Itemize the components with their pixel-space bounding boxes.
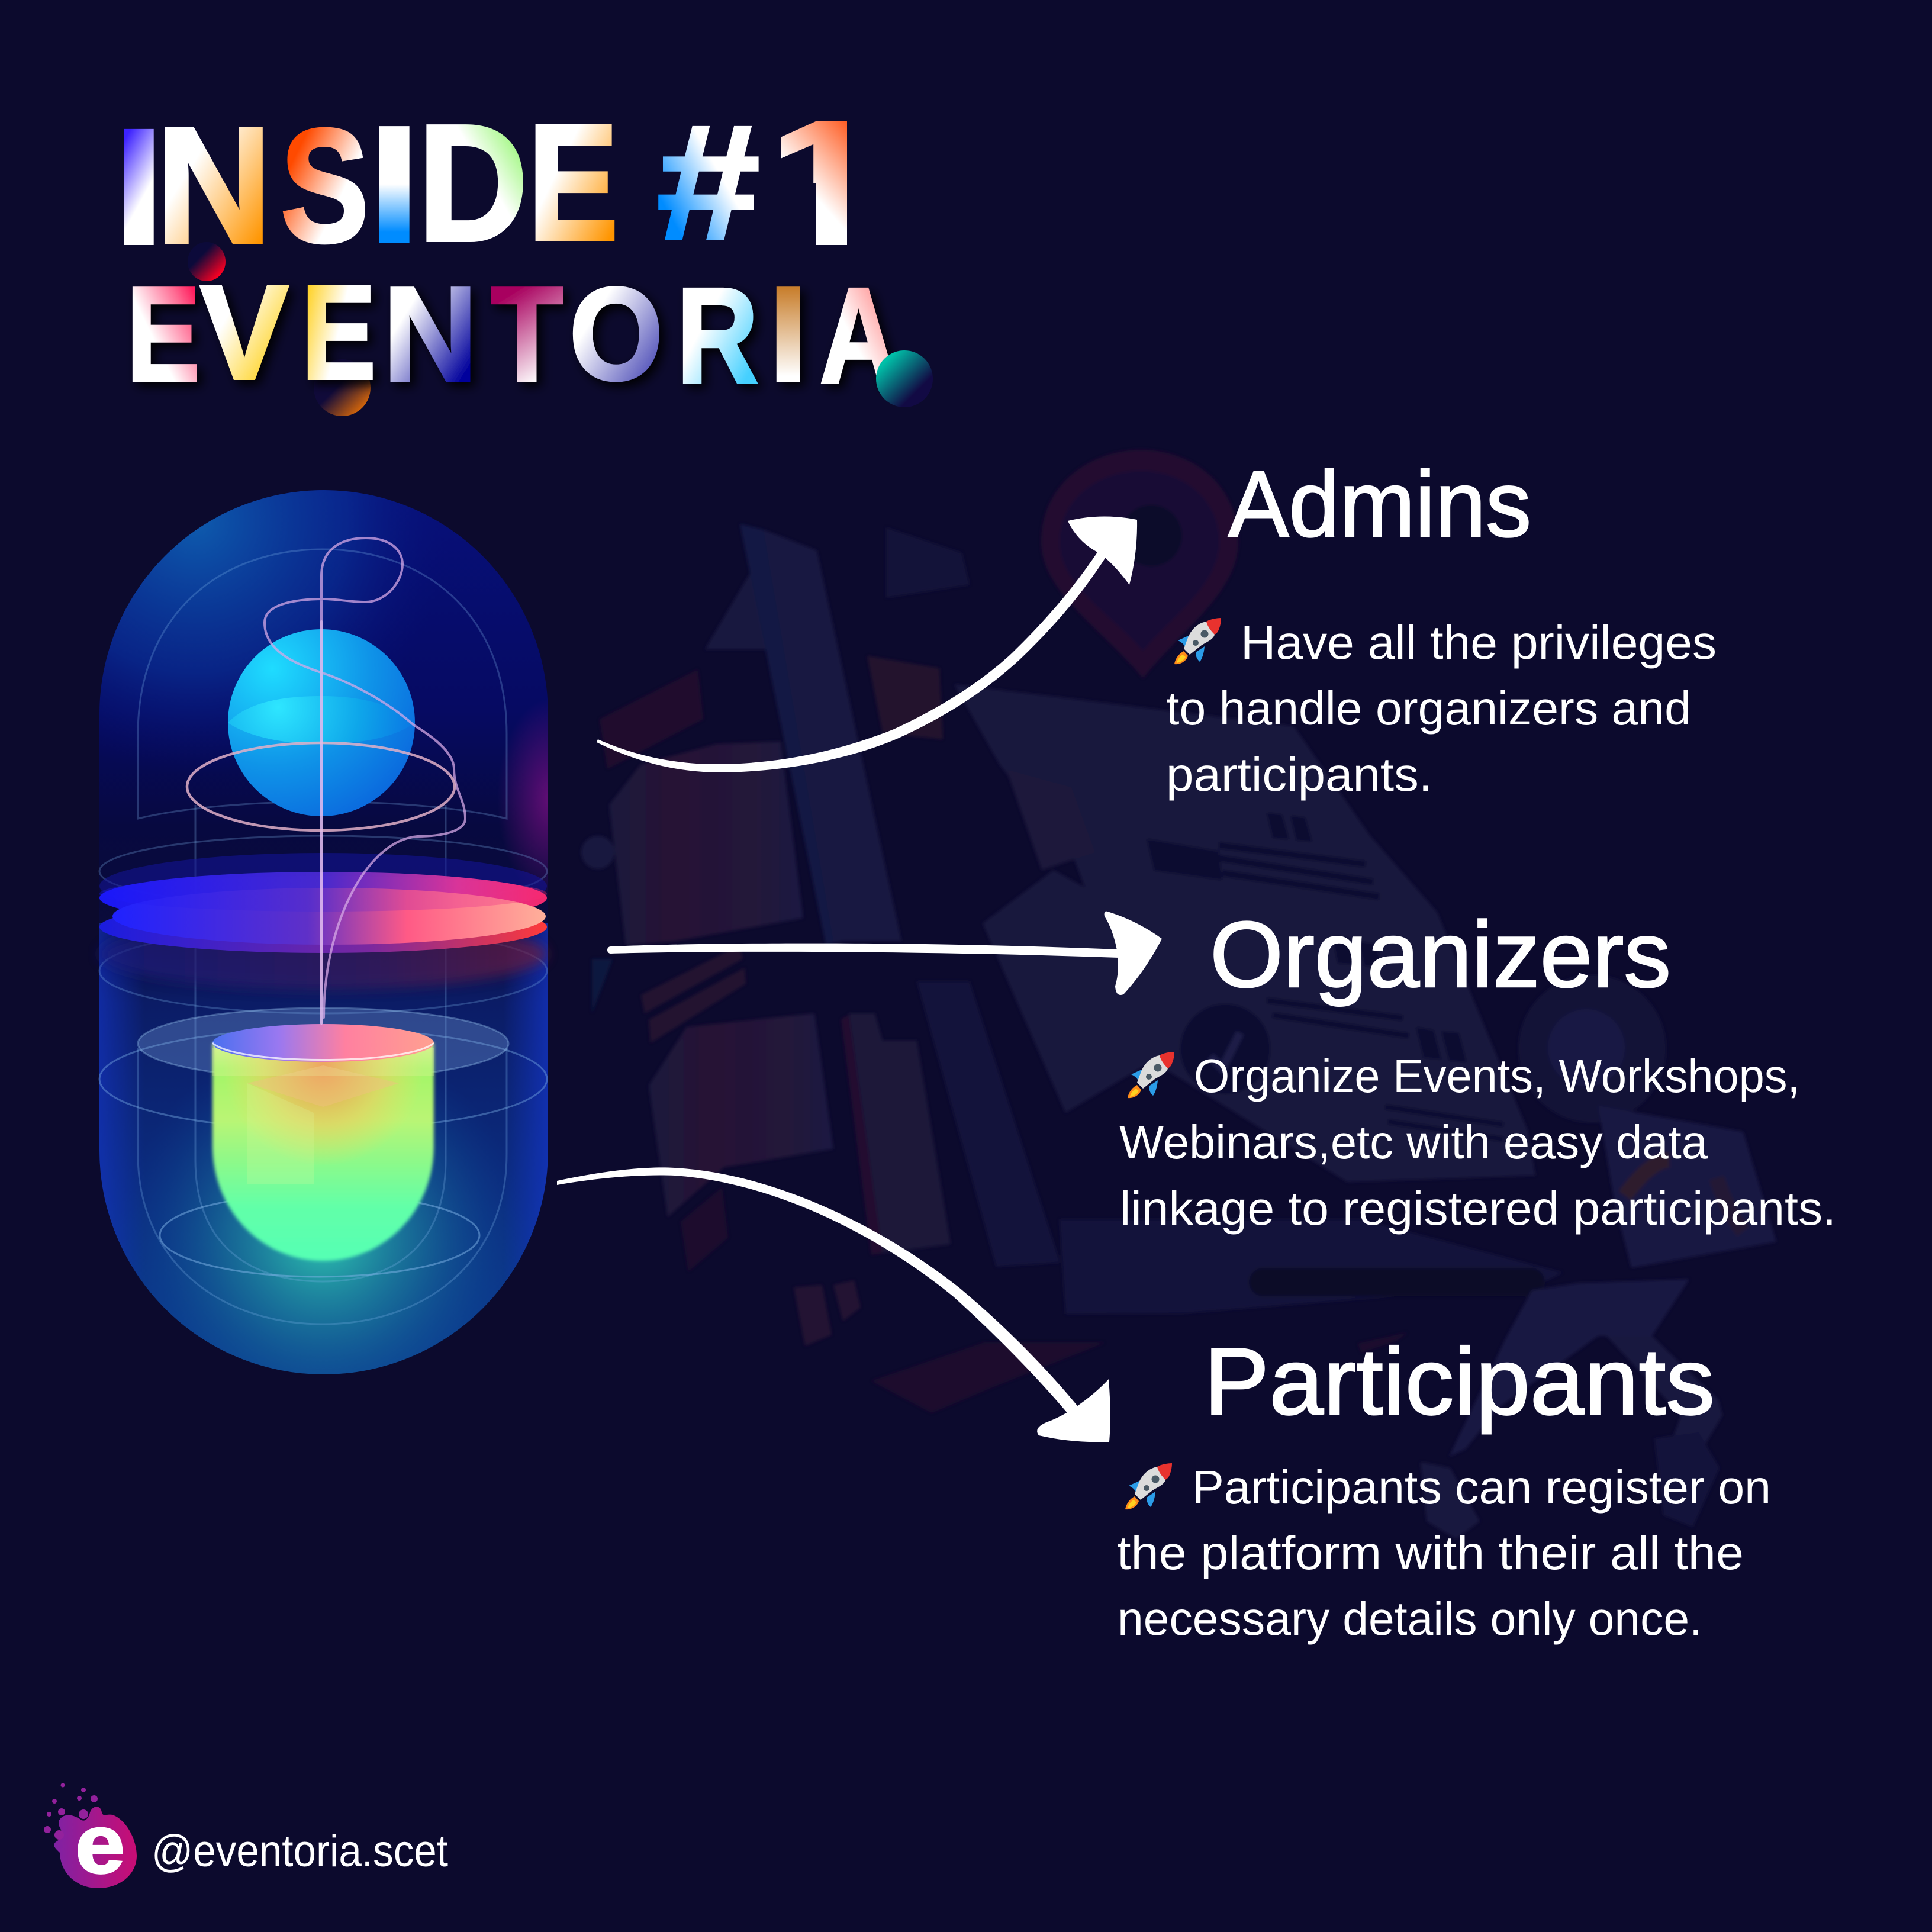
inner capsule outlines bbox=[99, 549, 547, 1324]
heading: Admins: Admins bbox=[1228, 452, 1531, 556]
title: INSIDE #1 bbox=[124, 121, 847, 245]
title: EVENTORIA: A bbox=[820, 260, 897, 411]
title: EVENTORIA: T bbox=[491, 259, 563, 410]
heading: Participants: Participants bbox=[1204, 1328, 1715, 1434]
glowing discs bbox=[99, 853, 547, 990]
title: EVENTORIA: R bbox=[677, 259, 758, 411]
decorative dot: teal bbox=[876, 350, 933, 407]
text: Admins description: to handle organizers and bbox=[1166, 682, 1691, 735]
title: EVENTORIA: I bbox=[768, 259, 808, 409]
bottom slab bbox=[1060, 1219, 1563, 1314]
text: Participants description: necessary details only once. bbox=[1118, 1592, 1702, 1645]
text: Organizers description: linkage to registered participants. bbox=[1120, 1182, 1836, 1235]
icon: rocket (Organizers) bbox=[1128, 1052, 1174, 1098]
arrow to Organizers bbox=[607, 912, 1162, 995]
spiral thread bbox=[187, 538, 465, 1023]
title: INSIDE #1: I bbox=[114, 95, 164, 278]
decorative dot: red bbox=[188, 242, 226, 281]
title: EVENTORIA: V bbox=[200, 257, 288, 407]
watermark illustration bbox=[581, 450, 1776, 1539]
tower bbox=[705, 524, 1060, 1267]
title: INSIDE #1: E bbox=[528, 91, 619, 275]
title: INSIDE #1: I bbox=[369, 92, 420, 276]
platter bbox=[138, 1008, 508, 1079]
text: Participants description: Participants can register on bbox=[1192, 1461, 1771, 1514]
logo: Eventoria e mark bbox=[44, 1783, 137, 1891]
text: Admins description: participants. bbox=[1166, 748, 1432, 801]
text: Participants description: the platform with their all the bbox=[1117, 1527, 1744, 1579]
sphere bbox=[228, 629, 415, 816]
title: INSIDE #1: D bbox=[418, 91, 528, 276]
text: Organizers description bbox=[1119, 1049, 1836, 1235]
icon: rocket (Participants) bbox=[1125, 1463, 1172, 1509]
text: Organizers description: Organize Events, Workshops, bbox=[1194, 1049, 1800, 1102]
text: Organizers description: Webinars,etc with easy data bbox=[1119, 1116, 1708, 1168]
title: INSIDE #1: S bbox=[281, 95, 369, 276]
title: INSIDE #1: # bbox=[657, 92, 760, 273]
title: EVENTORIA: O bbox=[569, 261, 663, 408]
glowing bowl bbox=[201, 1024, 444, 1261]
handle: @eventoria.scet bbox=[152, 1826, 448, 1876]
arrow to Admins bbox=[597, 516, 1137, 772]
capsule body bbox=[99, 490, 548, 1374]
title: INSIDE #1: 1 bbox=[755, 83, 897, 282]
document stack bbox=[954, 684, 1535, 1182]
heading: Organizers: Organizers bbox=[1210, 903, 1671, 1007]
title: EVENTORIA: N bbox=[383, 259, 478, 409]
capsule illustration bbox=[99, 490, 604, 1374]
icon: rocket (Admins) bbox=[1174, 618, 1221, 664]
text: Participants description bbox=[1117, 1461, 1771, 1645]
logo: Eventoria e mark: e bbox=[75, 1797, 125, 1891]
rings and cylinders bbox=[581, 669, 1408, 1413]
map pin bbox=[1041, 450, 1238, 678]
title: EVENTORIA bbox=[126, 257, 897, 411]
text: Admins description bbox=[1166, 616, 1717, 801]
decorative dot: orange bbox=[314, 359, 371, 416]
title: INSIDE #1: N bbox=[156, 94, 272, 278]
arrow to Participants bbox=[557, 1167, 1110, 1442]
title: EVENTORIA: E bbox=[301, 258, 376, 408]
text: Admins description: Have all the privileges bbox=[1241, 616, 1717, 669]
person bbox=[1421, 975, 1776, 1539]
title: EVENTORIA: E bbox=[126, 260, 200, 410]
